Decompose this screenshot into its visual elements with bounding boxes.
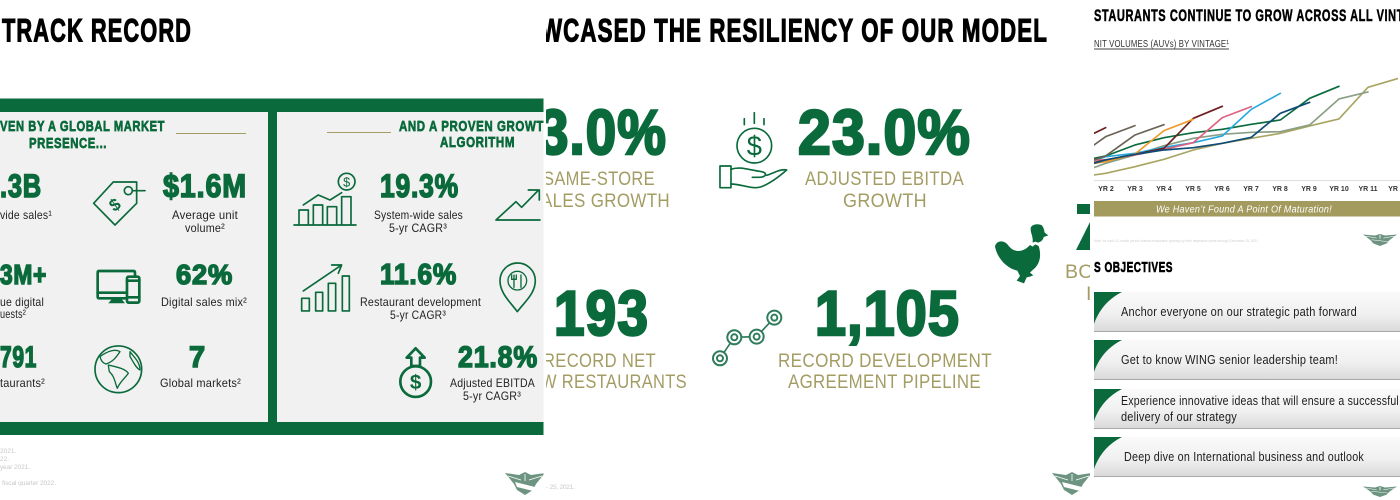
icon: restaurant pin	[500, 263, 535, 312]
stat: system-wide sales: vide sales¹	[0, 208, 52, 222]
stat: restaurants	[0, 346, 45, 387]
stat: record development pipeline	[779, 289, 992, 388]
stat: adjusted EBITDA CAGR: 21.8%	[458, 341, 538, 374]
stat: restaurant development CAGR: Restaurant development	[360, 295, 481, 309]
footnotes: 22.	[0, 456, 9, 463]
stat: restaurants: taurants²	[0, 376, 45, 390]
stat: average unit volume: volume²	[185, 221, 225, 235]
stat: record development pipeline: AGREEMENT PIPELINE	[788, 371, 981, 393]
objective bar 3	[1094, 389, 1400, 429]
stat: adjusted EBITDA CAGR: 5-yr CAGR³	[463, 389, 521, 403]
title: track record: TRACK RECORD	[2, 12, 192, 48]
icon: bar chart with coin	[294, 173, 356, 225]
chart axis labels: YR 2	[1098, 186, 1114, 193]
objective bar 2	[1094, 340, 1400, 380]
chart axis labels: YR 11	[1358, 186, 1378, 193]
heading: proven growth algorithm	[398, 120, 544, 148]
objective bar 3: delivery of our strategy	[1121, 410, 1237, 424]
stat: digital guests: ue digital	[0, 295, 44, 309]
logo: wings top	[1363, 234, 1397, 246]
stat: same-store sales growth: ALES GROWTH	[541, 190, 670, 212]
icon: price tag	[94, 182, 145, 225]
stat: global markets	[160, 346, 241, 387]
stat: same-store sales growth: SAME-STORE	[543, 168, 655, 190]
logo: wings	[1052, 472, 1092, 495]
stat: record net new restaurants: 193	[554, 279, 649, 349]
objective bar 1: Anchor everyone on our strategic path forward	[1121, 305, 1357, 319]
title: resiliency of our model: WCASED THE RESILIENCY OF OUR MODEL	[541, 12, 1048, 48]
stat: average unit volume	[162, 172, 245, 232]
stat: same-store sales growth	[546, 108, 668, 207]
stat: digital guests: 3M+	[0, 259, 47, 290]
panel: resiliency slide	[538, 12, 1094, 495]
stat: digital guests	[0, 264, 46, 318]
heading: proven growth algorithm: ALGORITHM	[440, 134, 515, 151]
icon: hand holding coin: $	[747, 131, 762, 162]
chart axis labels: YR 7	[1243, 186, 1259, 193]
chart axis labels: YR 9	[1301, 186, 1317, 193]
stat: system-wide sales CAGR	[374, 168, 463, 235]
icon: money bag with up arrow: $	[410, 371, 422, 394]
chart axis labels	[1098, 186, 1400, 193]
banner: maturation message: We Haven’t Found A Point Of Maturation!	[1156, 204, 1332, 216]
stat fragment: seven boneless	[1066, 204, 1090, 300]
footnote: - 25, 2021.	[546, 484, 575, 491]
stat: system-wide sales CAGR: 19.3%	[380, 168, 459, 204]
stat: adjusted EBITDA CAGR: Adjusted EBITDA	[450, 376, 535, 390]
footnotes: fiscal quarter 2022.	[2, 480, 56, 487]
heading: proven growth algorithm: AND A PROVEN GROWT	[399, 118, 544, 135]
stat: global markets: Global markets²	[160, 376, 241, 390]
stat: digital sales mix: 62%	[176, 259, 233, 290]
panel: track record slide	[0, 12, 545, 495]
icon: chicken	[995, 224, 1048, 283]
objective bar 2: Get to know WING senior leadership team!	[1121, 353, 1338, 367]
stat: average unit volume: $1.6M	[163, 168, 247, 204]
stat: digital sales mix	[162, 264, 247, 308]
stat: average unit volume: Average unit	[172, 208, 238, 222]
chart axis labels: YR 3	[1127, 186, 1143, 193]
chart axis labels: YR 4	[1156, 186, 1172, 193]
heading rule left	[176, 133, 246, 134]
objective bar 4	[1094, 437, 1400, 477]
icon: globe	[95, 346, 142, 393]
stat: record development pipeline: 1,105	[815, 279, 960, 349]
banner: maturation message	[1094, 201, 1400, 216]
stat: system-wide sales	[0, 174, 52, 219]
icon: connected nodes	[713, 311, 781, 365]
stat: digital guests: uests²	[0, 307, 26, 321]
right card background	[277, 112, 544, 422]
stat: record net new restaurants: RECORD NET	[543, 350, 656, 372]
objective bar 4: Deep dive on International business and outlook	[1124, 450, 1364, 464]
stat: restaurant development CAGR: 5-yr CAGR³	[390, 308, 446, 322]
footnotes: year 2021.	[0, 464, 30, 471]
footnotes: 2021.	[0, 448, 16, 455]
chart subtitle: NIT VOLUMES (AUVs) BY VINTAGE¹	[1094, 38, 1229, 50]
stat: adjusted EBITDA growth: ADJUSTED EBITDA	[805, 168, 964, 190]
stat: system-wide sales CAGR: System-wide sales	[374, 208, 463, 222]
stat: adjusted EBITDA growth	[798, 108, 970, 207]
stat: record net new restaurants: W RESTAURANTS	[541, 371, 687, 393]
stat fragment: seven boneless: I	[1086, 283, 1092, 305]
chart axis labels: YR 8	[1272, 186, 1288, 193]
footnotes	[0, 448, 56, 487]
icon: hand holding coin	[720, 113, 787, 188]
heading: global market presence: VEN BY A GLOBAL MARKET	[0, 118, 165, 135]
stat: record development pipeline: RECORD DEVELOPMENT	[778, 350, 992, 372]
chart axis labels: YR 6	[1214, 186, 1230, 193]
chart axis labels: YR 10	[1329, 186, 1349, 193]
icon: price tag: $	[105, 194, 125, 216]
icon: rising bars with arrow	[302, 265, 349, 311]
stat fragment: seven boneless: BO	[1065, 261, 1094, 283]
stat: global markets: 7	[189, 341, 206, 374]
green frame	[0, 98, 544, 435]
heading rule right	[327, 132, 391, 133]
icon: rising arrow	[496, 190, 540, 220]
stat: restaurant development CAGR: 11.6%	[380, 259, 457, 291]
stat: adjusted EBITDA CAGR	[450, 341, 538, 403]
chart axis labels: YR 5	[1185, 186, 1201, 193]
icon: money bag with up arrow	[400, 348, 431, 397]
logo: wings	[505, 472, 545, 495]
stat: digital sales mix: Digital sales mix²	[161, 295, 247, 309]
heading: global market presence	[0, 120, 165, 148]
stat: adjusted EBITDA growth: 23.0%	[798, 98, 971, 168]
left card background	[0, 112, 268, 422]
line chart: AUVs by vintage	[1094, 79, 1400, 181]
stat: record net new restaurants	[546, 289, 686, 388]
heading: global market presence: PRESENCE...	[29, 135, 107, 152]
stat: restaurants: 791	[0, 341, 37, 374]
stat: system-wide sales: .3B	[0, 168, 42, 204]
stat: restaurant development CAGR	[360, 259, 481, 322]
heading: objectives: S OBJECTIVES	[1094, 260, 1173, 276]
objective bar 1	[1094, 292, 1400, 332]
stat: same-store sales growth: 3.0%	[538, 98, 667, 168]
icon: devices	[98, 271, 139, 303]
footnote: Note: for each 12-month period reflects restaurants opening by their respective years through December 25, 2021	[1094, 239, 1258, 243]
icon: bar chart with coin: $	[343, 175, 350, 189]
stat: system-wide sales CAGR: 5-yr CAGR³	[389, 221, 447, 235]
stat: adjusted EBITDA growth: GROWTH	[843, 190, 927, 212]
panel: vintage AUV and objectives slides	[1094, 7, 1400, 497]
logo: wings bottom	[1363, 486, 1397, 497]
